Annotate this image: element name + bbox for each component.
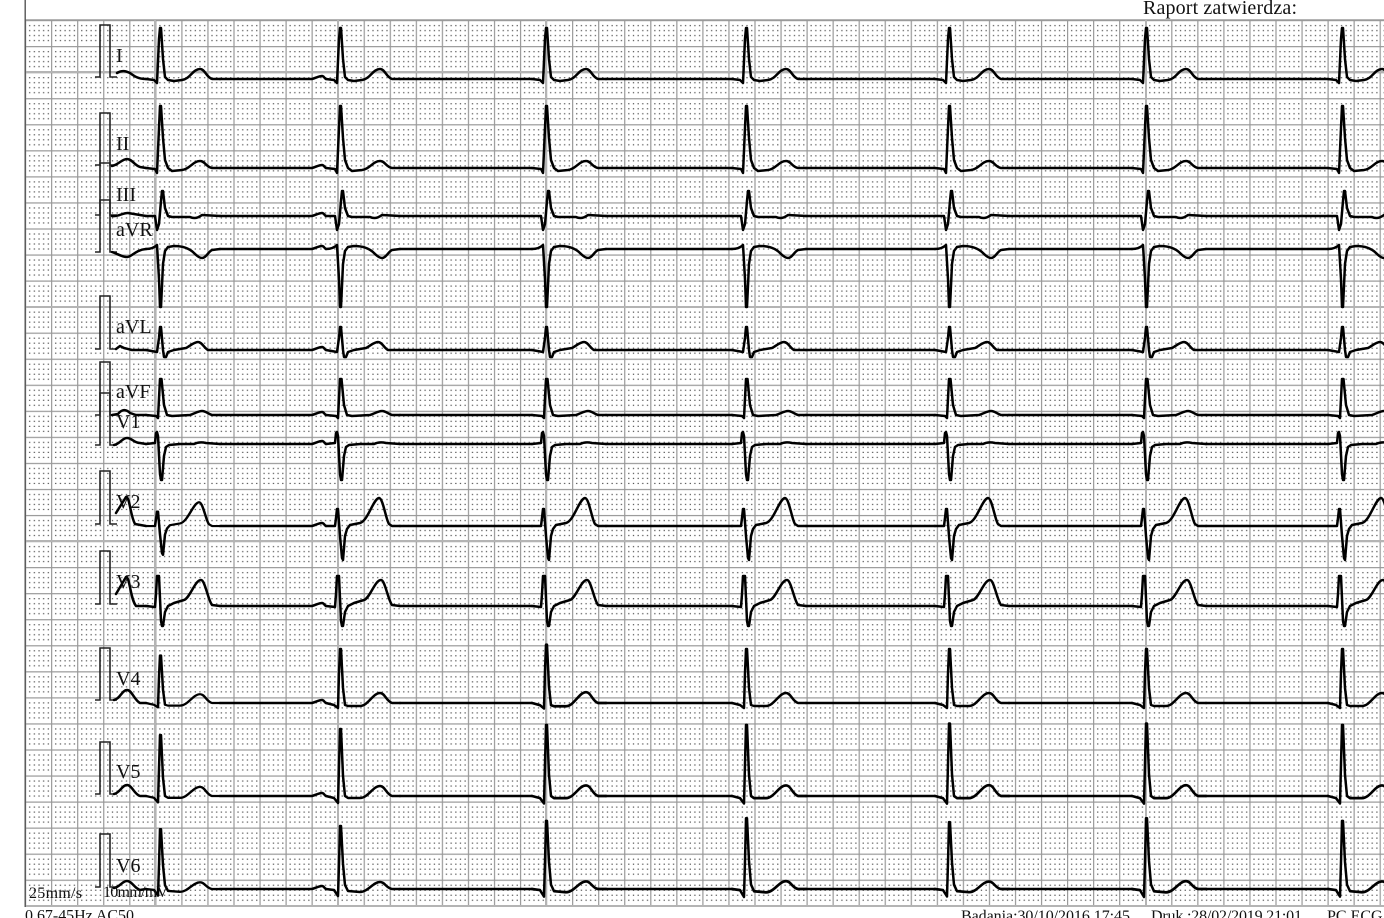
- lead III: [95, 163, 1384, 230]
- lead I: [95, 25, 1384, 83]
- calibration pulse V6: [95, 834, 117, 887]
- label II: II: [116, 133, 129, 155]
- trace V3: [116, 576, 1384, 626]
- trace aVR: [112, 245, 1384, 307]
- label aVF: aVF: [116, 381, 150, 403]
- trace I: [117, 28, 1384, 83]
- calibration pulse III: [95, 163, 117, 215]
- calibration pulse I: [95, 25, 117, 77]
- calibration pulse V1: [95, 393, 117, 445]
- label aVR: aVR: [116, 219, 153, 241]
- trace II: [112, 106, 1384, 173]
- lead II: [95, 106, 1384, 173]
- lead V2: [95, 471, 1384, 560]
- label III: III: [116, 184, 136, 206]
- calibration pulse II: [95, 113, 117, 165]
- calibration pulse aVL: [95, 296, 117, 349]
- lead V4: [95, 645, 1384, 708]
- label V5: V5: [116, 761, 140, 783]
- trace aVF: [112, 379, 1384, 418]
- trace V1: [114, 432, 1384, 480]
- label V1: V1: [116, 411, 140, 433]
- calibration pulse aVF: [95, 362, 117, 415]
- lead V3: [95, 551, 1384, 626]
- trace III: [112, 191, 1384, 230]
- label V2: V2: [116, 491, 140, 513]
- calibration pulse V4: [95, 648, 117, 700]
- gain note: 10mm/mV: [103, 884, 168, 901]
- lead aVR: [95, 200, 1384, 307]
- lead aVF: [95, 362, 1384, 418]
- lead V6: [95, 818, 1384, 897]
- label V6: V6: [116, 855, 140, 877]
- calibration pulse V5: [95, 742, 117, 794]
- trace V4: [114, 645, 1384, 708]
- trace V5: [114, 724, 1384, 804]
- lead V5: [95, 724, 1384, 804]
- label V4: V4: [116, 668, 140, 690]
- lead V1: [95, 393, 1384, 480]
- label I: I: [116, 45, 123, 67]
- trace aVL: [116, 327, 1384, 357]
- paper speed note: 25mm/s: [29, 885, 82, 902]
- trace V2: [116, 497, 1384, 560]
- label aVL: aVL: [116, 316, 152, 338]
- calibration pulse aVR: [95, 200, 117, 252]
- label V3: V3: [116, 571, 140, 593]
- trace V6: [114, 818, 1384, 897]
- calibration pulse V2: [95, 471, 117, 524]
- calibration pulse V3: [95, 551, 117, 604]
- lead aVL: [95, 296, 1384, 357]
